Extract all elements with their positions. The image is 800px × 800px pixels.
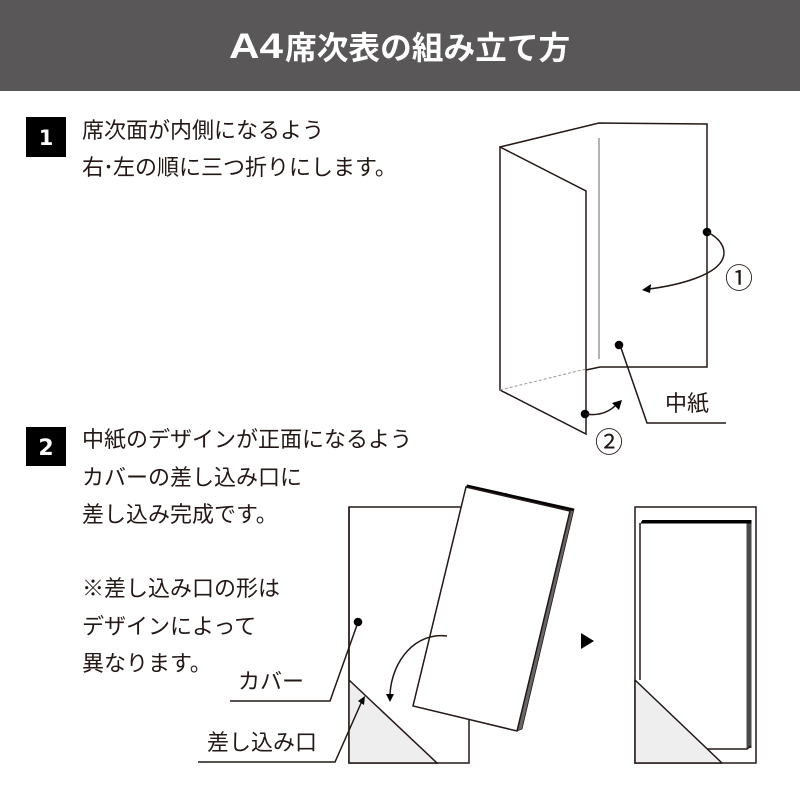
- arrow to finished state: [581, 633, 594, 649]
- label: circled 2: ②: [595, 427, 623, 458]
- insertion arrow: [386, 636, 447, 702]
- step 1 number badge: 1: [39, 126, 53, 150]
- inner fold line: [598, 138, 600, 359]
- step 1 text: 右･左の順に三つ折りにします。: [82, 155, 397, 180]
- insert sheet: [413, 484, 574, 731]
- note text: デザインによって: [82, 614, 256, 639]
- note text: [82, 576, 280, 676]
- finished result: [635, 507, 756, 763]
- step 2 number badge: 2: [38, 436, 54, 461]
- arrow 1: [642, 228, 724, 293]
- header banner: [0, 0, 800, 91]
- step 2 text: カバーの差し込み口に: [82, 465, 302, 490]
- pocket triangle: [635, 680, 722, 763]
- step 2 text: 差し込み完成です。: [82, 502, 278, 527]
- leader: cover: [230, 618, 362, 701]
- step 1 number badge: [26, 117, 66, 157]
- step 2 text: [82, 427, 412, 527]
- step 1 text: [82, 118, 397, 180]
- note text: ※差し込み口の形は: [82, 576, 280, 601]
- centre sheet: [500, 123, 707, 370]
- title: A4: [229, 27, 284, 66]
- note text: 異なります。: [82, 651, 212, 676]
- leader: pocket: 差し込み口: [207, 730, 317, 755]
- hidden edge: [500, 369, 586, 390]
- step 1 text: 席次面が内側になるよう: [82, 118, 324, 143]
- step 2 text: 中紙のデザインが正面になるよう: [82, 427, 412, 452]
- pocket triangle: [349, 680, 437, 763]
- label: circled 1: ①: [725, 263, 753, 294]
- cover outline: [635, 507, 756, 763]
- leader: centre sheet: 中紙: [665, 391, 709, 416]
- leader: centre sheet: [615, 341, 726, 423]
- header banner: 席次表の組み立て方: [285, 30, 570, 66]
- arrow 2: [581, 400, 622, 418]
- inserted sheet: [640, 520, 752, 749]
- step 2 number badge: [26, 427, 66, 466]
- step 1 fold diagram: [500, 123, 753, 458]
- cover outline: [349, 507, 469, 763]
- leader: pocket: [198, 696, 365, 762]
- leader: cover: カバー: [238, 669, 304, 694]
- left folded panel: [500, 147, 586, 434]
- cover with sheet being inserted: [198, 484, 574, 763]
